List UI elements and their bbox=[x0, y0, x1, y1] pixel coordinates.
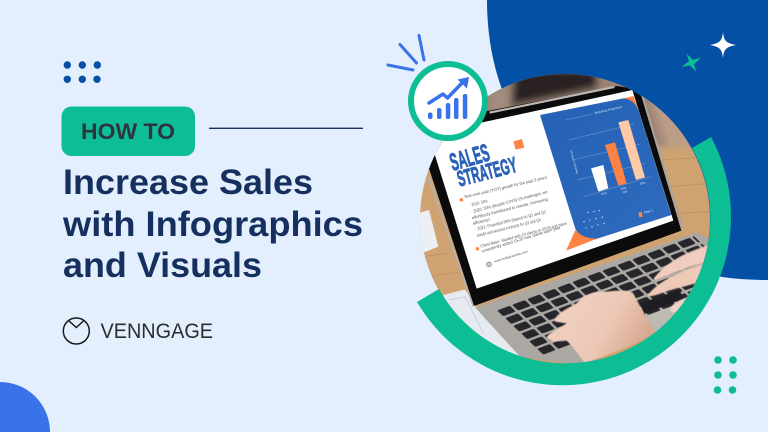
slide body text: - 2020: 30% (despite COVID-19 challenges, we bbox=[471, 189, 548, 214]
quarter circle bottom left bbox=[0, 382, 50, 432]
slide orange square bbox=[513, 139, 524, 150]
keyboard bbox=[498, 236, 707, 354]
slide body text: efficiency) bbox=[472, 217, 491, 226]
chart badge bbox=[411, 64, 485, 138]
lid left edge bbox=[428, 177, 473, 307]
how to pill: HOW TO bbox=[81, 119, 175, 144]
chart x labels bbox=[601, 182, 646, 195]
chart legend: Page 1 bbox=[643, 208, 654, 214]
space bar bbox=[640, 290, 684, 314]
how to pill bbox=[62, 106, 195, 156]
icon: rising bars bbox=[428, 94, 467, 119]
slide website icon bbox=[487, 262, 491, 267]
slide body text: - 2019: 24% bbox=[469, 198, 488, 208]
slide body text: www.reallygreatsite.com bbox=[493, 249, 529, 264]
slide body text: Year-over-year (YOY) growth for the past 3 years: bbox=[463, 175, 548, 199]
paper crease bbox=[449, 297, 483, 333]
chart x labels: 2021 bbox=[639, 180, 646, 186]
slide chart bbox=[566, 105, 654, 217]
slide body text: consistently added 15-20 new clients each year. bbox=[481, 224, 562, 254]
orange corner top bbox=[623, 96, 640, 113]
table background bbox=[417, 70, 714, 367]
chart x labels: 2020 bbox=[620, 186, 627, 191]
wood grain bbox=[424, 157, 714, 277]
slide blue panel bbox=[540, 98, 671, 239]
paper under laptop bbox=[443, 289, 520, 356]
slide body text: results and secured contracts for Q3 and Q4 bbox=[476, 217, 542, 238]
green arc bbox=[417, 137, 731, 385]
orange corner bottom bbox=[566, 229, 597, 251]
chart title: Marketing Projections bbox=[594, 105, 623, 115]
icon: white sparkle bbox=[710, 32, 736, 58]
bar 2021 bbox=[618, 120, 645, 180]
title: Increase Sales bbox=[63, 163, 313, 202]
hands bbox=[547, 244, 713, 363]
slide body text: - 2021: Projected 99% (based on Q1 and Q2 bbox=[475, 209, 547, 232]
chart x labels: 2019 bbox=[601, 191, 608, 196]
slide dots bbox=[583, 210, 605, 229]
lid right edge bbox=[641, 96, 683, 229]
bar 2020 bbox=[605, 142, 627, 186]
venngage logo: VENNGAGE bbox=[100, 319, 213, 343]
icon: green star bbox=[682, 54, 701, 72]
slide body text: Client Base: Started with 10 clients in 2019 and have bbox=[480, 221, 568, 249]
left hand bbox=[547, 291, 655, 363]
slide body text bbox=[463, 175, 568, 264]
bar 2019 bbox=[591, 165, 608, 192]
badge rays bbox=[388, 36, 424, 70]
blurred background top bbox=[486, 74, 692, 150]
trackpad bbox=[646, 302, 676, 332]
right hand finger lower bbox=[647, 264, 703, 297]
right hand finger upper bbox=[653, 244, 713, 281]
slide heading bbox=[449, 144, 516, 186]
slide heading: STRATEGY bbox=[454, 152, 520, 192]
chart x labels: Year bbox=[622, 189, 628, 194]
title: and Visuals bbox=[63, 246, 262, 285]
paper left of laptop bbox=[420, 210, 438, 252]
dark blue blob bbox=[487, 0, 768, 280]
slide page bbox=[428, 90, 673, 289]
slide heading: SALES bbox=[447, 140, 493, 177]
icon: rising arrow bbox=[429, 77, 469, 103]
title bbox=[62, 163, 363, 285]
title: with Infographics bbox=[62, 205, 363, 244]
slide body text: effortlessly transitioned to remote, increasing bbox=[471, 196, 549, 220]
lid top highlight bbox=[489, 86, 615, 114]
laptop photo bbox=[420, 74, 710, 364]
chart grid lines bbox=[566, 114, 651, 197]
rule next to pill bbox=[209, 128, 363, 129]
dots top left bbox=[64, 61, 101, 83]
dots bottom right bbox=[714, 356, 737, 394]
icon: logo circle bbox=[63, 318, 89, 344]
laptop lid bbox=[417, 86, 681, 306]
venngage logo bbox=[63, 318, 213, 344]
right hand thumb bbox=[670, 296, 688, 313]
slide bullets bbox=[459, 198, 463, 202]
chart y axis title: Revenue (millions) bbox=[569, 150, 579, 174]
laptop base bbox=[475, 233, 712, 365]
